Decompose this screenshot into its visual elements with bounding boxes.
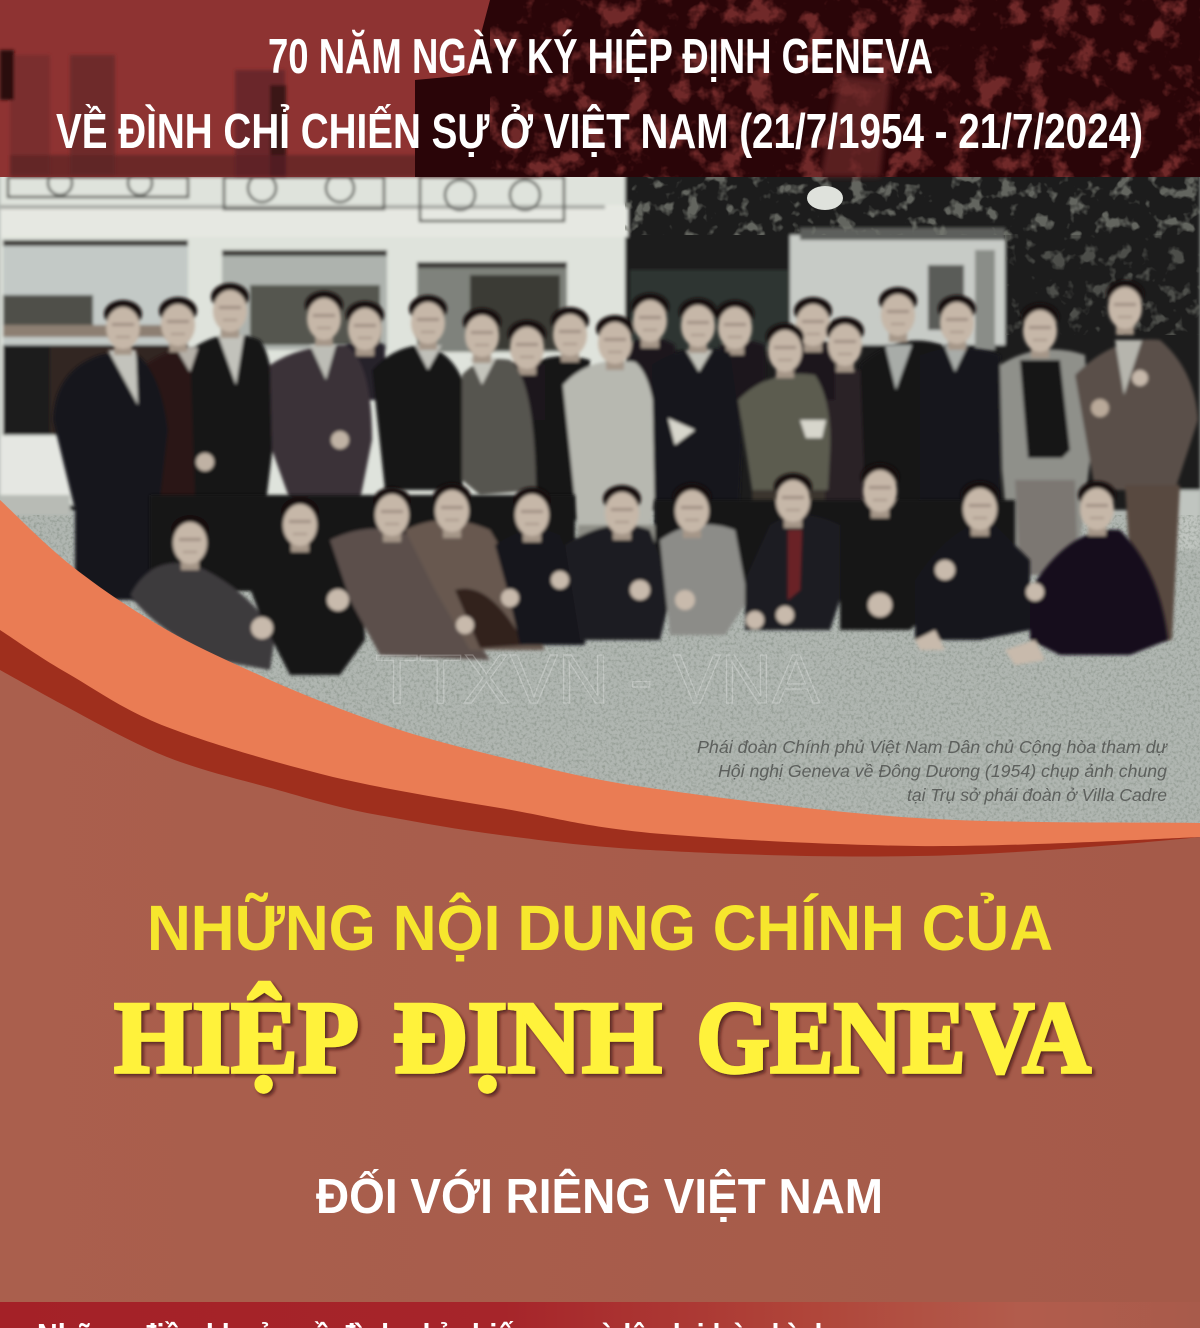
back row of standing delegates: [53, 280, 1198, 640]
heading line 2: GENEVA: [696, 981, 1091, 1095]
background: building and trees: [0, 0, 1200, 830]
windows: [3, 240, 188, 435]
main heading: [114, 891, 1091, 1224]
photo: Vietnamese delegation at Villa Cadre: [0, 0, 1200, 830]
suits, middle group: [563, 361, 658, 530]
banner title: 70 NĂM NGÀY KÝ HIỆP ĐỊNH GENEVA: [268, 29, 933, 84]
grass texture: [0, 515, 1200, 830]
banner title: [56, 29, 1143, 159]
heading line 1: NHỮNG NỘI DUNG CHÍNH CỦA: [147, 891, 1053, 964]
balcony railings: [8, 171, 564, 221]
photo caption: Hội nghị Geneva về Đông Dương (1954) chụp ảnh chung: [718, 761, 1167, 781]
bottom red strip with cut-off text: [0, 1302, 1200, 1328]
banner: villa shutters and lamp: [0, 50, 540, 177]
heading line 2: ĐỊNH: [393, 981, 662, 1095]
suits, right group: [1000, 349, 1090, 560]
heading line 3: ĐỐI VỚI RIÊNG VIỆT NAM: [316, 1169, 883, 1224]
suits, left group: [145, 347, 232, 510]
top banner with red overlay: [0, 0, 1200, 177]
photo caption: [697, 737, 1169, 805]
heading line 2: HIỆP: [114, 981, 359, 1095]
banner: dark tree canopy: [415, 0, 1200, 177]
decorative curved swoosh: [0, 500, 1200, 1328]
heading line 2: [114, 981, 1091, 1095]
tree foliage specks: [625, 177, 1200, 235]
photo caption: tại Trụ sở phái đoàn ở Villa Cadre: [907, 785, 1167, 805]
watermark: TTXVN - VNA: [375, 640, 820, 718]
photo caption: Phái đoàn Chính phủ Việt Nam Dân chủ Cộng hòa tham dự: [697, 737, 1169, 757]
front row of seated delegates: [130, 463, 1168, 675]
